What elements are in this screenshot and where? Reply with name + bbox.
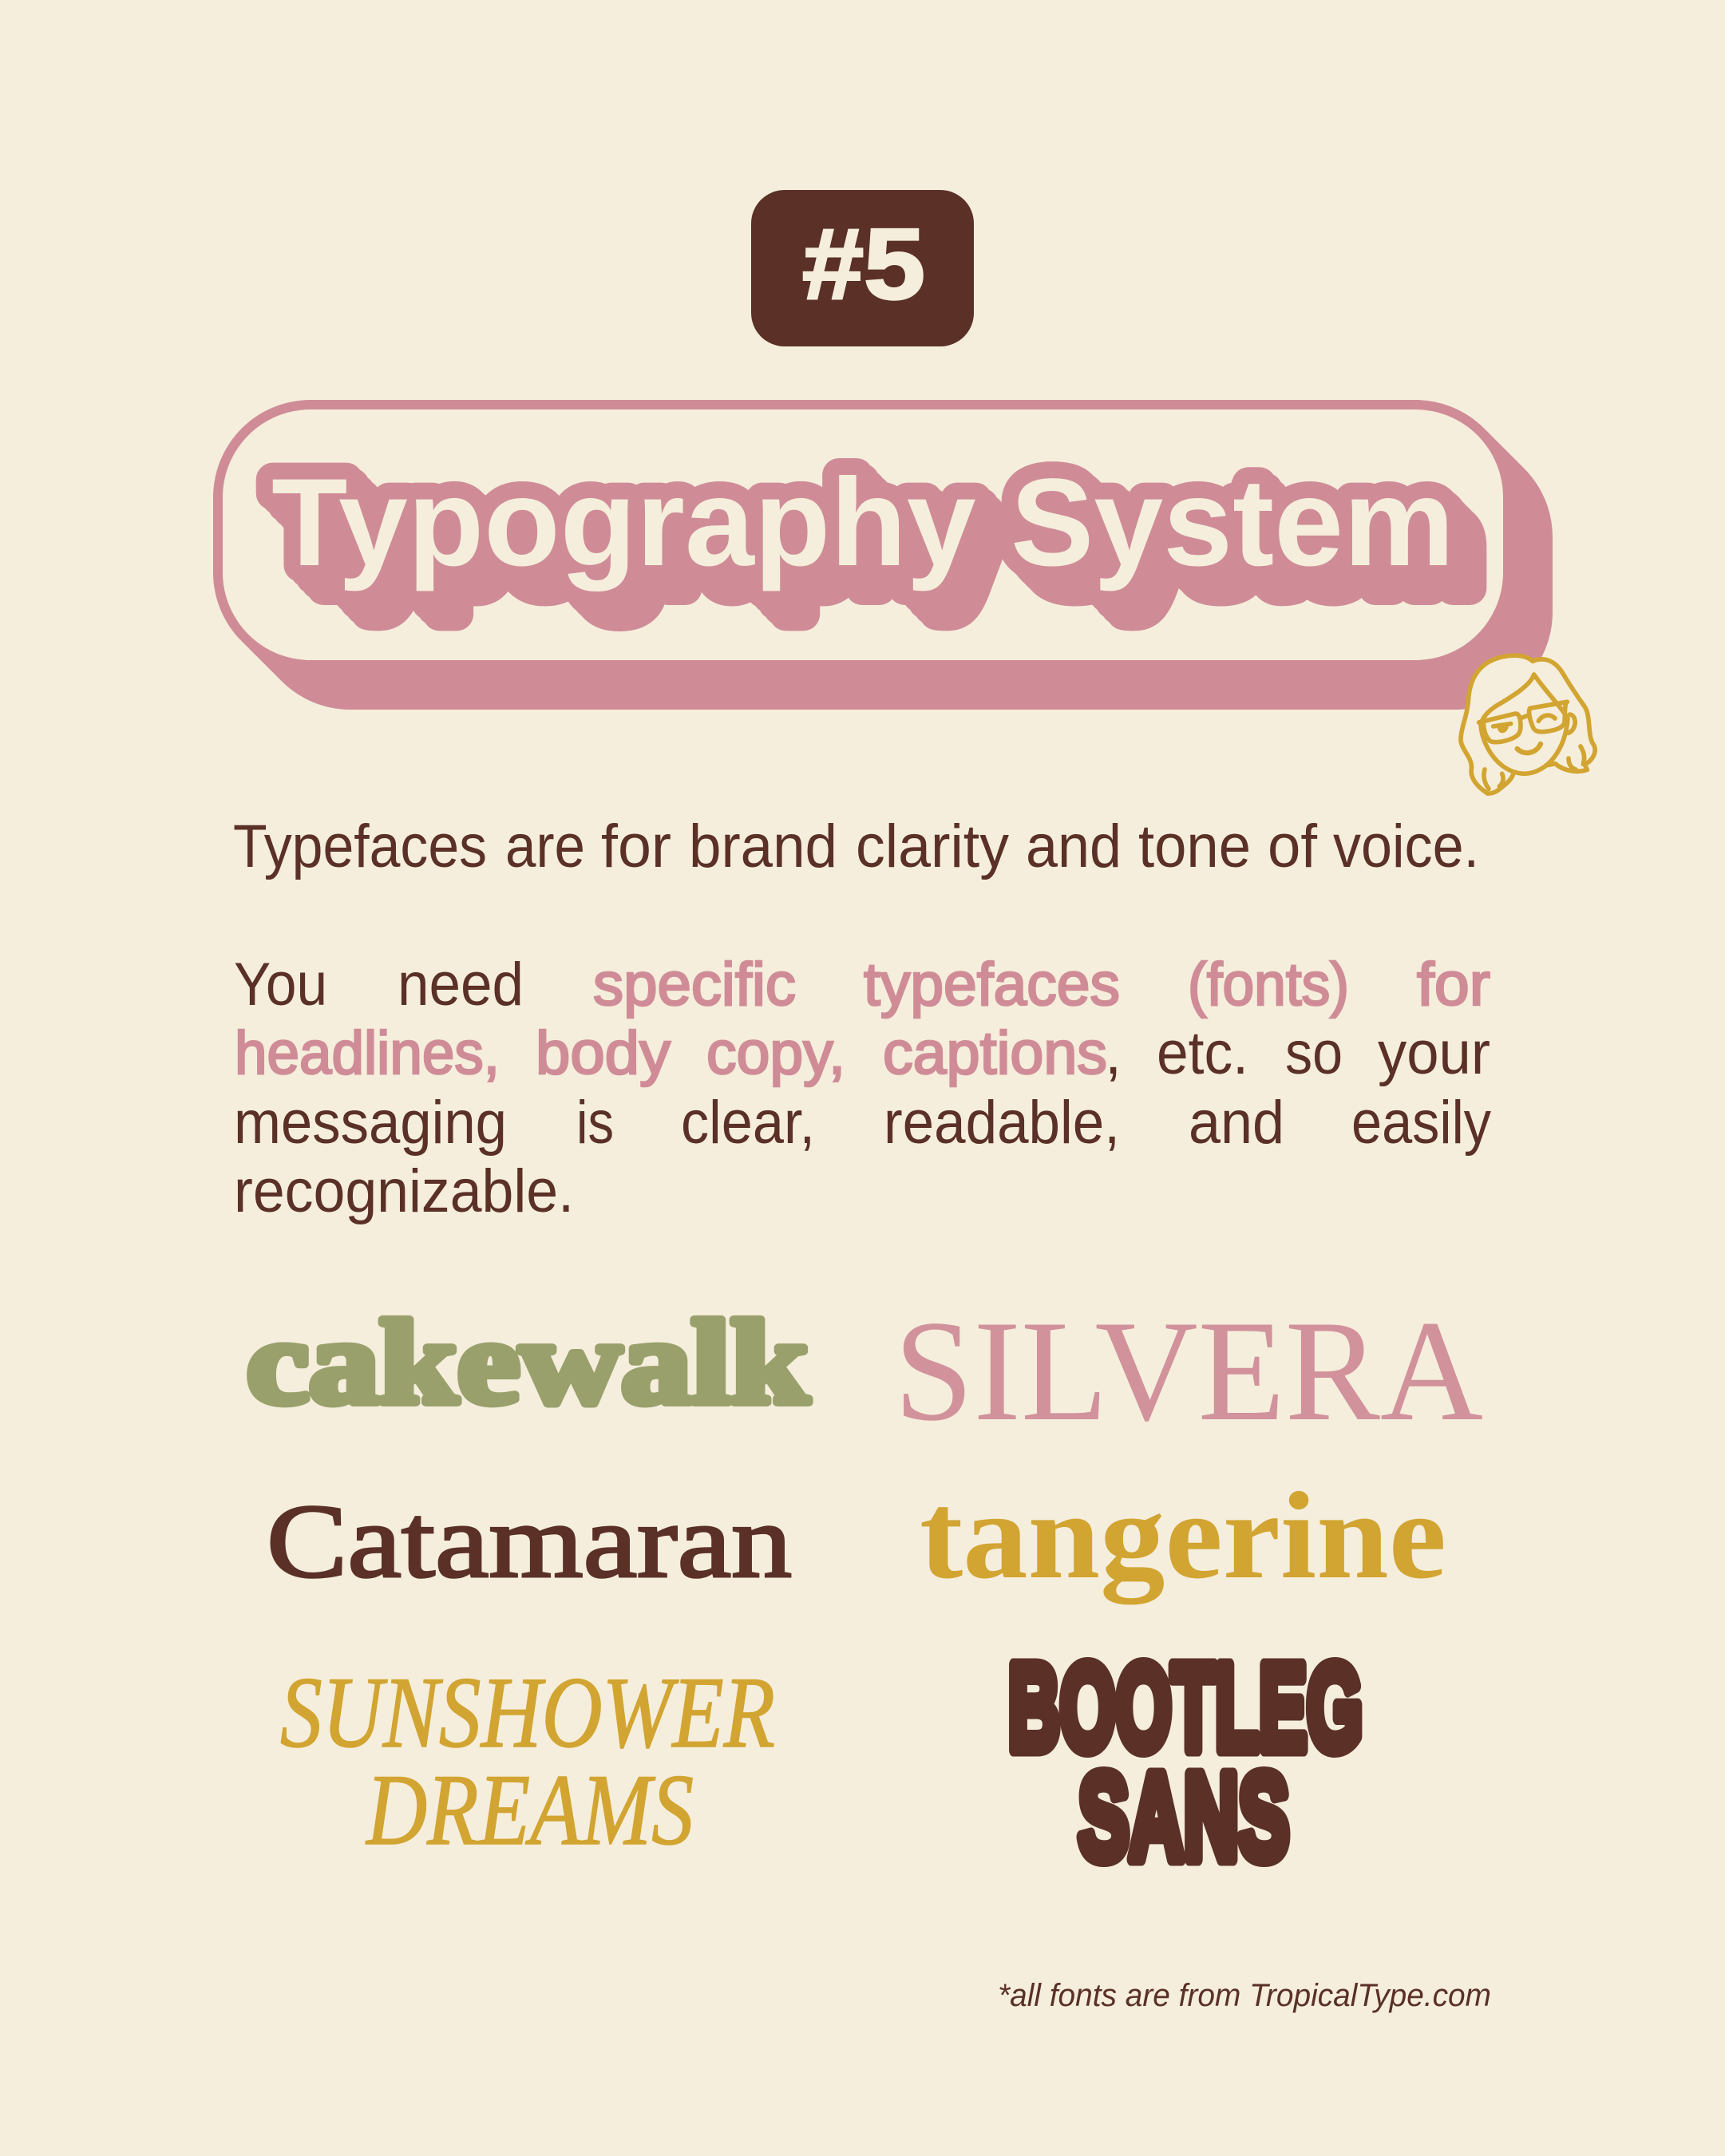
text block: justified paragraph with pink highlights: messaging xyxy=(234,1089,507,1157)
font sample: SILVERA: SILVERA xyxy=(894,1292,1483,1451)
title banner: Typography System xyxy=(213,400,1553,710)
text block: intro sentence: and xyxy=(1026,813,1122,880)
footnote: font source: *all fonts are from TropicalType.com xyxy=(998,1978,1491,2013)
text block: justified paragraph with pink highlights: easily xyxy=(1351,1089,1491,1157)
text block: intro sentence: Typefaces xyxy=(233,813,487,880)
text block: intro sentence xyxy=(233,813,1479,880)
text block: justified paragraph with pink highlights: specific xyxy=(593,951,796,1019)
font sample: Catamaran: Catamaran xyxy=(267,1482,792,1600)
text block: justified paragraph with pink highlights: , xyxy=(1105,1019,1122,1087)
text block: justified paragraph with pink highlights: captions xyxy=(883,1019,1107,1087)
text block: justified paragraph with pink highlights: and xyxy=(1189,1089,1284,1157)
text block: intro sentence: voice. xyxy=(1333,813,1479,880)
badge: #5: #5 xyxy=(802,208,925,320)
font sample: Sunshower Dreams: DREAMS xyxy=(365,1754,694,1866)
text block: justified paragraph with pink highlights: copy, xyxy=(706,1019,845,1087)
text block: justified paragraph with pink highlights: etc. xyxy=(1157,1019,1248,1087)
font sample: Sunshower Dreams xyxy=(280,1657,775,1866)
text block: justified paragraph with pink highlights: for xyxy=(1417,951,1490,1019)
title banner: Typography System: Typography System xyxy=(283,465,1466,604)
font sample: Bootleg Sans: BOOTLEG xyxy=(1008,1639,1363,1776)
icon: winking face with glasses xyxy=(1461,655,1595,793)
text block: intro sentence: for xyxy=(601,813,671,880)
title banner: Typography System: Typography System xyxy=(295,477,1478,615)
text block: justified paragraph with pink highlights: body xyxy=(536,1019,671,1087)
text block: justified paragraph with pink highlights: need xyxy=(398,951,524,1019)
title banner: Typography System: Typography System xyxy=(271,453,1454,592)
title banner: Typography System: Typography System xyxy=(289,471,1472,610)
font sample: Bootleg Sans: SANS xyxy=(1078,1748,1289,1885)
title banner: Typography System: Typography System xyxy=(278,459,1461,598)
text block: intro sentence: of xyxy=(1268,813,1318,880)
text block: justified paragraph with pink highlights: recognizable. xyxy=(234,1157,574,1225)
text block: intro sentence: clarity xyxy=(856,813,1009,880)
title banner: Typography System: Typography System xyxy=(271,453,1454,592)
text block: intro sentence: brand xyxy=(689,813,837,880)
text block: justified paragraph with pink highlights: clear, xyxy=(681,1089,815,1157)
text block: justified paragraph with pink highlights: headlines, xyxy=(235,1019,500,1087)
font sample: Bootleg Sans xyxy=(1008,1639,1363,1885)
text block: justified paragraph with pink highlights: is xyxy=(576,1089,614,1157)
text block: intro sentence: tone xyxy=(1138,813,1251,880)
text block: justified paragraph with pink highlights: your xyxy=(1378,1019,1490,1087)
text block: justified paragraph with pink highlights: (fonts) xyxy=(1188,951,1349,1019)
badge: #5 xyxy=(751,190,974,346)
font sample: tangerine: tangerine xyxy=(920,1466,1446,1605)
text block: justified paragraph with pink highlights xyxy=(234,951,1491,1225)
text block: justified paragraph with pink highlights: so xyxy=(1285,1019,1343,1087)
text block: justified paragraph with pink highlights: readable, xyxy=(884,1089,1120,1157)
font sample: Sunshower Dreams: SUNSHOWER xyxy=(280,1657,775,1769)
font sample: cakewalk: cakewalk xyxy=(247,1296,809,1429)
text block: justified paragraph with pink highlights: You xyxy=(234,951,327,1019)
text block: justified paragraph with pink highlights: typefaces xyxy=(864,951,1120,1019)
text block: intro sentence: are xyxy=(505,813,585,880)
